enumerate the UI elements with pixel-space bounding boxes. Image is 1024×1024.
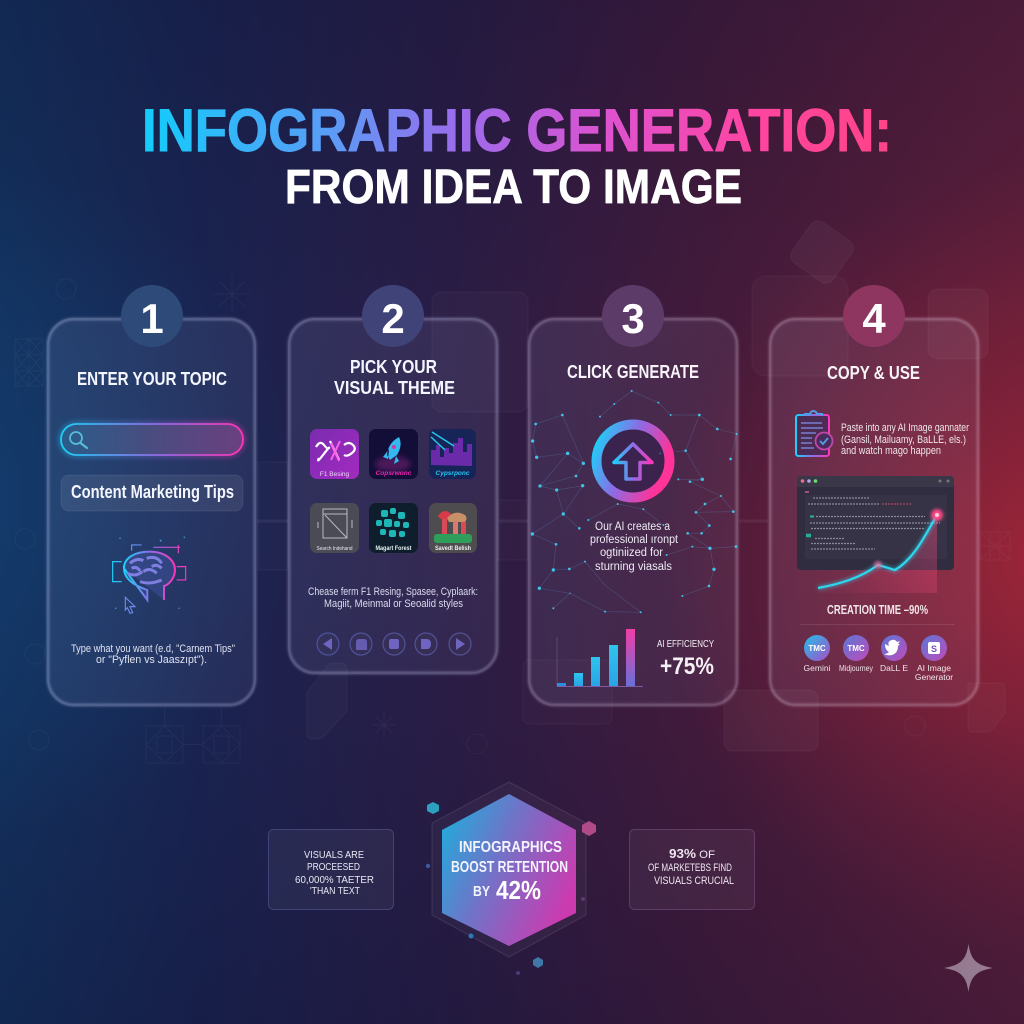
title xyxy=(142,97,892,214)
thumbnail: magic forest xyxy=(369,503,418,553)
stat box: marketers 93%: OF MARKETEBS FIND xyxy=(648,862,732,874)
stat hexagon: retention 42%: BY xyxy=(473,883,490,900)
step badge 2: 2 xyxy=(381,295,405,342)
search bar xyxy=(61,424,243,455)
bar chart: ai efficiency xyxy=(557,629,643,686)
tool: ai image generator: Generator xyxy=(915,672,953,682)
heading: copy and use: COPY & USE xyxy=(827,363,920,383)
icon: generate ring with arrow xyxy=(596,424,670,498)
step badge 3: 3 xyxy=(621,295,645,342)
tool: gemini xyxy=(804,635,831,673)
tool: midjourney xyxy=(839,635,874,673)
thumbnail: seasonal mushrooms: Savedt Belish xyxy=(435,545,471,552)
heading: click generate: CLICK GENERATE xyxy=(567,362,699,382)
description text: professional ıronpt xyxy=(590,534,679,546)
tool: midjourney: TMC xyxy=(847,644,865,653)
stat box: visuals processed faster: 'THAN TEXT xyxy=(310,885,360,897)
app window with prompt xyxy=(797,476,954,570)
tool: dall-e: DaLL E xyxy=(880,663,908,673)
thumbnail: cyberpunk city: Cypsrponc xyxy=(436,470,470,477)
description text: ogtiniized for xyxy=(600,547,663,559)
description text xyxy=(590,521,679,573)
step badge 2 xyxy=(362,285,424,347)
background decorative shapes xyxy=(15,217,1010,763)
tool: gemini: TMC xyxy=(808,644,826,653)
heading: pick your visual theme: VISUAL THEME xyxy=(334,378,455,398)
icon: brain with cursor xyxy=(113,536,186,613)
step badge 4: 4 xyxy=(862,295,886,342)
thumbnail: f1 racing: F1 Besing xyxy=(320,471,350,478)
line chart: creation time xyxy=(818,509,943,593)
stat hexagon: retention 42%: 42% xyxy=(496,875,541,905)
description text: Chease ferm F1 Resing, Spasee, Cyplaark: xyxy=(308,586,478,598)
sparkle mark xyxy=(944,944,993,992)
stat box: marketers 93% xyxy=(630,830,754,910)
thumbnail: seasonal mushrooms xyxy=(429,503,477,553)
thumbnail: cyberpunk city xyxy=(429,429,476,479)
step badge 4 xyxy=(843,285,905,347)
stat box: marketers 93%: 93% OF xyxy=(669,846,715,861)
tool: dall-e xyxy=(880,635,908,673)
panel: step 3 click generate xyxy=(528,285,738,706)
stat box: marketers 93%: VISUALS CRUCIAL xyxy=(654,875,734,887)
stat: creation time: CREATION TIME –90% xyxy=(827,603,928,617)
description text: sturning viasals xyxy=(595,561,672,573)
stat: ai efficiency +75% xyxy=(657,638,714,680)
tool: ai image generator: S xyxy=(931,644,937,654)
description text: or "Pyflen vs Jaaszıpt"). xyxy=(96,654,207,666)
network background xyxy=(531,390,738,613)
thumbnail: minimal: Search Indehand xyxy=(316,546,352,552)
icon: clipboard with check xyxy=(796,411,832,456)
description text: Paste into any AI Image gannater xyxy=(841,422,969,434)
stat hexagon: retention 42% xyxy=(432,782,586,957)
step badge 3 xyxy=(602,285,664,347)
stat hexagon: retention 42%: INFOGRAPHICS xyxy=(459,839,562,856)
description text: Type what you want (e.d, "Carnem Tips" xyxy=(71,643,235,655)
tool: ai image generator xyxy=(915,635,953,682)
step badge 1: 1 xyxy=(140,295,164,342)
tool: gemini: Gemini xyxy=(804,663,831,673)
step badge 1 xyxy=(121,285,183,347)
stat box: visuals processed faster: VISUALS ARE xyxy=(304,849,364,861)
thumbnail: space rocket xyxy=(369,429,418,479)
input value: content marketing tips xyxy=(61,475,243,511)
description text: and watch mago happen xyxy=(841,445,941,457)
tool: ai image generator: AI Image xyxy=(917,663,951,673)
panel: step 2 pick your visual theme xyxy=(288,285,498,674)
heading: pick your visual theme xyxy=(334,357,455,398)
panel: step 1 enter your topic xyxy=(47,285,256,706)
stat hexagon: retention 42%: BOOST RETENTION xyxy=(451,859,568,876)
title: INFOGRAPHIC GENERATION: xyxy=(142,97,892,164)
stat: ai efficiency +75%: +75% xyxy=(660,653,714,680)
thumbnail: f1 racing xyxy=(310,429,359,479)
description text: Our AI creates a xyxy=(595,521,671,533)
floating hex accents xyxy=(426,802,596,975)
description text xyxy=(308,586,478,610)
theme selector buttons xyxy=(317,633,471,655)
title: FROM IDEA TO IMAGE xyxy=(285,161,742,214)
stat box: visuals processed faster: PROCEESED xyxy=(307,861,360,873)
stat: ai efficiency +75%: AI EFFICIENCY xyxy=(657,638,714,650)
thumbnail: space rocket: Copsrwonc xyxy=(376,470,412,477)
stat box: visuals processed faster xyxy=(268,830,394,910)
stat box: visuals processed faster: 60,000% TAETER xyxy=(295,874,374,886)
description text: (Gansil, Mailuamy, BaLLE, els.) xyxy=(841,434,966,446)
heading: pick your visual theme: PICK YOUR xyxy=(350,357,437,377)
input value: content marketing tips: Content Marketing Tips xyxy=(71,482,234,502)
thumbnail: magic forest: Magart Forest xyxy=(376,545,412,552)
description text: Magiit, Meinmal or Seoalid styles xyxy=(324,598,463,610)
tool icons row xyxy=(800,624,955,682)
description text xyxy=(71,643,235,666)
thumbnail: minimal xyxy=(310,503,359,553)
heading: enter your topic: ENTER YOUR TOPIC xyxy=(77,369,227,389)
panel: step 4 copy and use xyxy=(769,285,979,706)
tool: midjourney: Midjourney xyxy=(839,663,874,673)
description text xyxy=(841,422,969,457)
